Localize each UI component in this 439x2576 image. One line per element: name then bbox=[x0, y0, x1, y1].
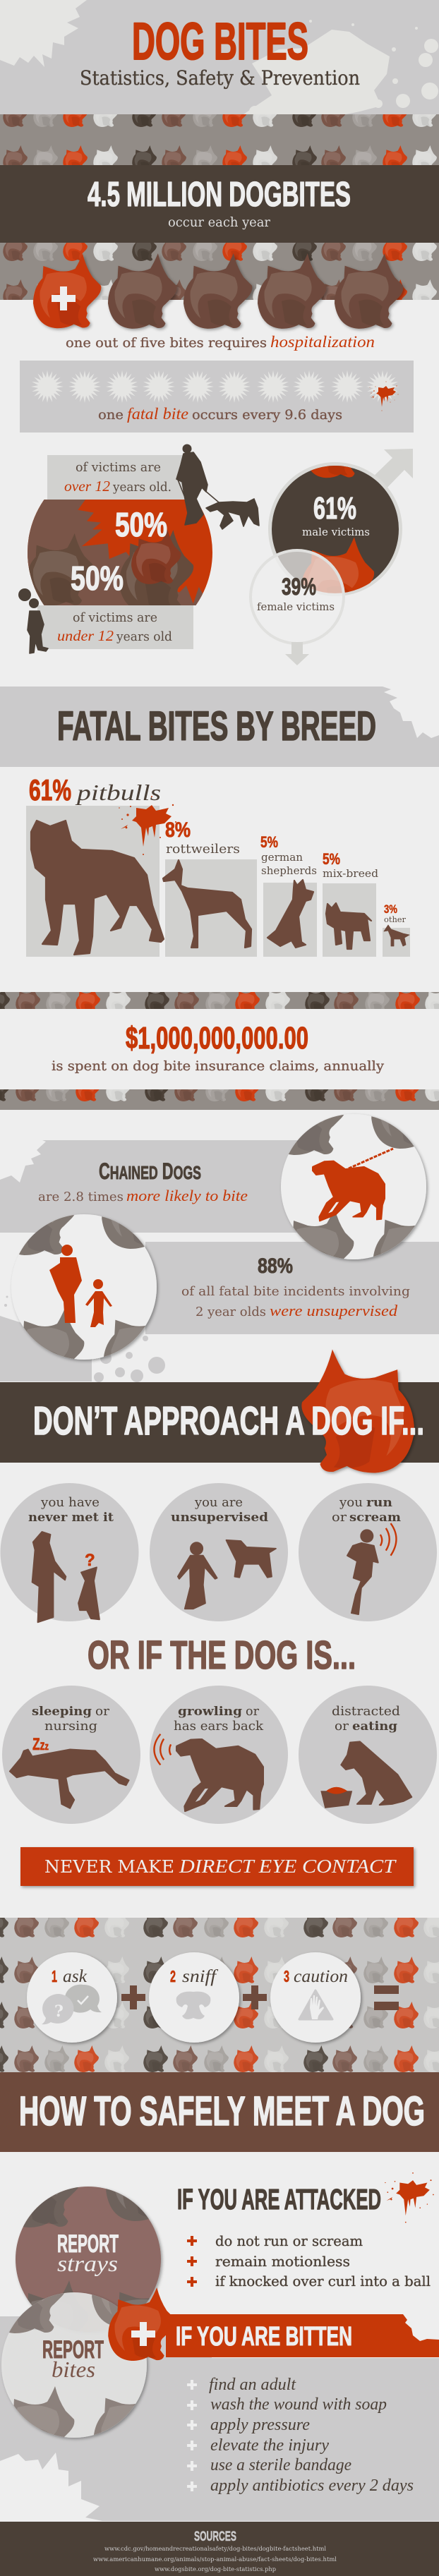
panel: over 12: years old. bbox=[112, 480, 172, 495]
footer: sources bbox=[0, 2522, 439, 2576]
footer: sources: www.cdc.gov/homeandrecreationalsafety/dog-bites/dogbite-factsheet.html bbox=[104, 2546, 326, 2552]
circle: run or scream: or bbox=[332, 1510, 347, 1525]
banner: 4.5 million dogbites: occur each year bbox=[168, 214, 271, 230]
circle: distracted or eating: eating bbox=[352, 1719, 397, 1734]
equals sign bbox=[374, 1985, 399, 2010]
circle: never met it: ? bbox=[85, 1551, 95, 1570]
hospitalization text bbox=[66, 333, 375, 351]
grey splatter bbox=[0, 1295, 165, 1382]
step 2: sniff bbox=[149, 1952, 239, 2043]
chart: female victims circle: 39% bbox=[282, 574, 316, 600]
breed: mix-breed: 5% bbox=[323, 850, 340, 868]
circle: growling: or bbox=[246, 1704, 259, 1719]
panel: unsupervised bbox=[145, 1242, 439, 1334]
panel: under 12: years old bbox=[116, 629, 172, 644]
panel: under 12 bbox=[37, 605, 193, 649]
step 2: sniff: sniff bbox=[182, 1967, 218, 1986]
circle: distracted or eating: distracted bbox=[332, 1704, 400, 1719]
breed: mix-breed bbox=[323, 850, 378, 957]
panel: chained dogs bbox=[0, 1140, 311, 1233]
step 1: ask: 1 bbox=[52, 1967, 57, 1985]
chart: male victims circle: male victims bbox=[302, 526, 370, 538]
circle: distracted or eating bbox=[299, 1686, 437, 1824]
circle: unsupervised bbox=[150, 1483, 288, 1621]
list: bitten advice: apply pressure bbox=[210, 2416, 310, 2434]
plus sign bbox=[243, 1985, 267, 2009]
insurance cost amount: $1,000,000,000.00 bbox=[126, 1021, 308, 1056]
panel: fatal bite frequency: fatal bite bbox=[127, 405, 188, 423]
banner: if you are bitten: IF YOU ARE BITTEN bbox=[176, 2322, 352, 2352]
circle: sleeping or nursing: Zzz bbox=[32, 1735, 49, 1754]
list: bitten advice: elevate the injury bbox=[210, 2436, 329, 2455]
pattern strip below cost bbox=[0, 1089, 439, 1110]
breed: pitbulls: 61% bbox=[29, 773, 71, 806]
breed: german shepherds bbox=[260, 833, 317, 957]
footer: sources: SOURCES bbox=[194, 2529, 236, 2544]
step 3: caution bbox=[270, 1952, 361, 2043]
50 percent under 12: 50% bbox=[71, 560, 124, 598]
panel: grey bitten background bbox=[0, 2316, 439, 2521]
pattern strip above cost bbox=[0, 992, 439, 1009]
footer: sources: www.americanhumane.org/animals/stop-animal-abuse/fact-sheets/dog-bites.html bbox=[93, 2556, 337, 2563]
panel: chained dogs: CHAINED DOGS bbox=[99, 1159, 201, 1184]
step 1: ask bbox=[27, 1952, 117, 2043]
circle: growling bbox=[150, 1686, 288, 1824]
circle: unsupervised: unsupervised bbox=[171, 1511, 268, 1525]
circle: sleeping or nursing bbox=[2, 1686, 140, 1824]
arrow: female symbol bbox=[285, 642, 309, 665]
panel: over 12 bbox=[47, 455, 187, 500]
panel: under 12: under 12 bbox=[57, 627, 114, 644]
step 2: sniff: 2 bbox=[170, 1967, 176, 1985]
circle: run or scream: you bbox=[339, 1495, 363, 1510]
list: bitten advice: find an adult bbox=[209, 2376, 296, 2394]
circle: never met it: never met it bbox=[28, 1511, 114, 1525]
footer: sources: www.dogsbite.org/dog-bite-statistics.php bbox=[155, 2566, 276, 2572]
panel: unsupervised: were unsupervised bbox=[270, 1302, 398, 1319]
pattern panel: three steps background bbox=[0, 1911, 439, 2072]
panel: over 12: over 12 bbox=[64, 478, 110, 495]
circle: report bites: bites bbox=[52, 2357, 95, 2382]
circle: run or scream: run bbox=[366, 1496, 392, 1510]
five dog heads: one in five bbox=[33, 253, 403, 329]
banner: 4.5 million dogbites bbox=[0, 165, 439, 243]
list: attacked advice: if knocked over curl into a ball bbox=[215, 2273, 431, 2290]
step 3: caution: caution bbox=[294, 1967, 348, 1986]
list: bitten advice: use a sterile bandage bbox=[210, 2456, 351, 2474]
list: bitten advice: apply antibiotics every 2 days bbox=[210, 2477, 414, 2495]
callout: never make direct eye contact: DIRECT EYE CONTACT bbox=[179, 1856, 397, 1877]
panel: unsupervised: 88% bbox=[258, 1254, 293, 1278]
icon: chained red dog bbox=[312, 1149, 393, 1221]
icon: man walking dog bbox=[176, 445, 259, 529]
list: bitten advice: wash the wound with soap bbox=[210, 2395, 387, 2414]
panel: over 12: of victims are bbox=[76, 460, 161, 475]
circle: never met it bbox=[0, 1483, 138, 1622]
pattern strip with dog heads bbox=[0, 100, 439, 306]
arrow: male symbol bbox=[368, 449, 413, 494]
panel: fatal bite frequency: occurs every 9.6 days bbox=[192, 407, 342, 423]
breed: german shepherds: 5% bbox=[260, 833, 278, 851]
panel: unsupervised: 2 year olds bbox=[196, 1305, 266, 1319]
breed: pitbulls bbox=[26, 773, 176, 957]
plus sign bbox=[121, 1985, 145, 2009]
breed: rottweilers bbox=[163, 818, 257, 957]
circle: growling: has ears back bbox=[174, 1719, 264, 1734]
panel: chained dogs: more likely to bite bbox=[126, 1187, 248, 1204]
list: attacked advice bbox=[187, 2232, 431, 2290]
chart: female victims circle: female victims bbox=[257, 600, 335, 613]
banner: how to safely meet a dog bbox=[0, 2072, 439, 2152]
list: bitten advice bbox=[187, 2376, 414, 2495]
circle: report bites: REPORT bbox=[42, 2336, 104, 2364]
chart: male victims circle: 61% bbox=[313, 491, 356, 526]
circle: unsupervised child bbox=[11, 1214, 160, 1363]
circle: report strays: strays bbox=[57, 2251, 118, 2276]
panel: fatal bite frequency: one bbox=[98, 407, 124, 423]
circle: sleeping or nursing: or bbox=[95, 1704, 109, 1719]
heading: if you are attacked bbox=[177, 2172, 434, 2223]
breed: german shepherds: shepherds bbox=[261, 864, 317, 877]
callout: never make direct eye contact bbox=[20, 1847, 414, 1886]
breed: german shepherds: german bbox=[261, 851, 303, 864]
icon: child bbox=[18, 588, 48, 653]
panel: chained dogs: are 2.8 times bbox=[38, 1190, 124, 1204]
list: attacked advice: remain motionless bbox=[215, 2253, 350, 2270]
chart: age split circle bbox=[28, 500, 212, 605]
step 1: ask: ask bbox=[63, 1967, 88, 1986]
panel: unsupervised: of all fatal bite incidents involving bbox=[181, 1284, 410, 1299]
step 1: ask: ? bbox=[54, 2002, 64, 2021]
chart: male victims circle bbox=[268, 462, 402, 595]
breed: rottweilers: rottweilers bbox=[166, 842, 240, 857]
circle: sleeping or nursing: nursing bbox=[44, 1719, 97, 1734]
breed: rottweilers: 8% bbox=[165, 818, 191, 842]
panel: under 12: of victims are bbox=[73, 610, 157, 625]
title: DOG BITES bbox=[132, 12, 308, 71]
chart: female victims circle bbox=[251, 550, 344, 643]
list: attacked advice: do not run or scream bbox=[215, 2232, 363, 2249]
50 percent over 12: 50% bbox=[115, 507, 167, 544]
callout: never make direct eye contact: NEVER MAKE bbox=[44, 1857, 174, 1877]
circle: report strays bbox=[16, 2186, 164, 2307]
breed: pitbulls: pitbulls bbox=[76, 780, 161, 805]
hospitalization text: one out of five bites requires bbox=[66, 335, 267, 351]
breed: mix-breed: mix-breed bbox=[323, 867, 378, 880]
circle: run or scream bbox=[299, 1483, 437, 1621]
panel: fatal bite frequency bbox=[20, 361, 414, 433]
insurance cost caption: is spent on dog bite insurance claims, annually bbox=[52, 1058, 384, 1074]
breed: other: 3% bbox=[384, 902, 397, 916]
breed: other: other bbox=[384, 915, 407, 924]
circle: sleeping or nursing: sleeping bbox=[32, 1705, 92, 1719]
banner: don't approach a dog if bbox=[0, 1350, 439, 1473]
hospitalization text: hospitalization bbox=[270, 333, 375, 351]
circle: never met it: you have bbox=[40, 1495, 100, 1510]
circle: run or scream: scream bbox=[349, 1511, 401, 1525]
circle: report strays: REPORT bbox=[57, 2230, 119, 2258]
header panel bbox=[0, 0, 439, 117]
circle: report bites bbox=[1, 2292, 150, 2441]
subtitle: Statistics, Safety & Prevention bbox=[80, 66, 360, 90]
circle: chained dog bbox=[281, 1113, 429, 1263]
icon: adult and child in red bbox=[49, 1245, 112, 1327]
banner: if you are bitten bbox=[108, 2287, 439, 2361]
step 3: caution: 3 bbox=[284, 1967, 289, 1985]
circle: growling: growling bbox=[178, 1705, 242, 1719]
breed: other bbox=[383, 902, 410, 957]
banner: fatal bites by breed bbox=[0, 687, 439, 767]
circle: distracted or eating: or bbox=[335, 1719, 349, 1734]
circle: unsupervised: you are bbox=[194, 1495, 243, 1510]
